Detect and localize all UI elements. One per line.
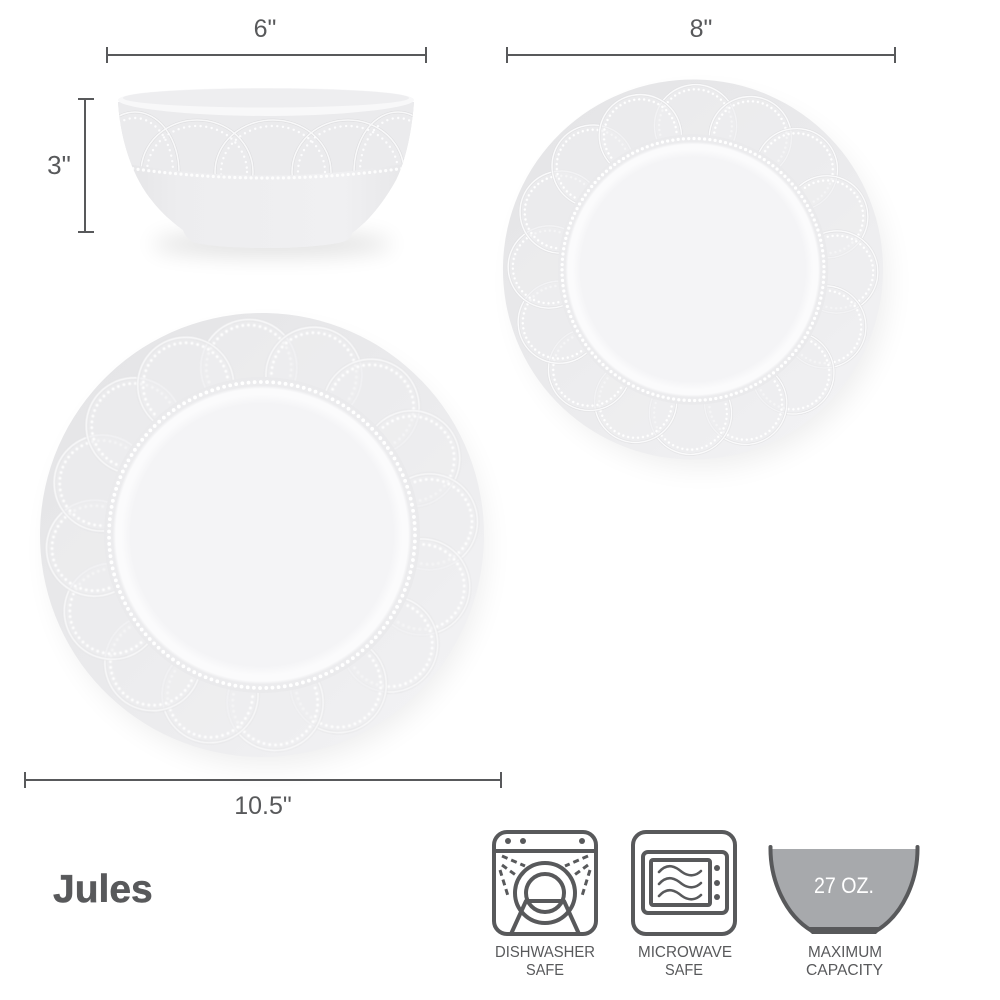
dinner plate photo (23, 296, 501, 774)
dimension: bowl width 6 inches: 6" (254, 15, 276, 43)
label: maximum capacity (806, 944, 883, 979)
icon: bowl maximum capacity 27 oz (770, 847, 918, 979)
label: dishwasher safe: DISHWASHER (495, 944, 595, 961)
icon: bowl maximum capacity 27 oz: 27 OZ. (814, 873, 874, 898)
salad plate photo (500, 76, 886, 466)
dimension: dinner plate width 10.5 inches: 10.5" (234, 792, 292, 820)
product name: Jules (53, 868, 153, 911)
label: dishwasher safe: SAFE (526, 962, 564, 979)
label: maximum capacity: CAPACITY (806, 962, 883, 979)
label: maximum capacity: MAXIMUM (808, 944, 882, 961)
icon: microwave safe (633, 832, 735, 979)
label: microwave safe: SAFE (665, 962, 703, 979)
label: microwave safe: MICROWAVE (638, 944, 732, 961)
dimension: bowl height 3 inches: 3" (47, 150, 71, 180)
label: microwave safe (638, 944, 732, 979)
icon: dishwasher safe (494, 832, 596, 979)
bowl photo (118, 88, 414, 262)
dimension: salad plate width 8 inches: 8" (690, 15, 712, 43)
dimension: bowl height 3 inches (47, 98, 94, 233)
label: dishwasher safe (495, 944, 595, 979)
